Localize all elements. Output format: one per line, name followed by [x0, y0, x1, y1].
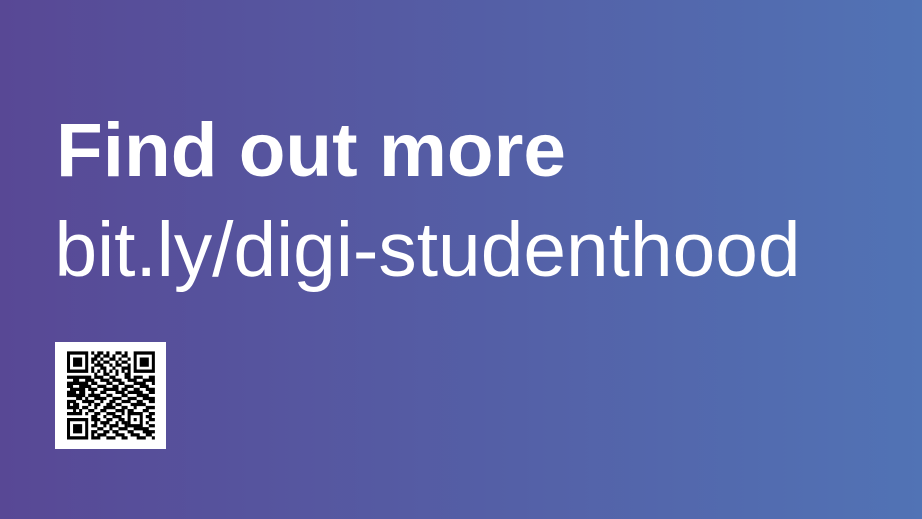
heading: Find out more — [56, 108, 566, 193]
link text: bit.ly/digi-studenthood — [54, 208, 801, 292]
icon: QR code — [55, 342, 166, 449]
